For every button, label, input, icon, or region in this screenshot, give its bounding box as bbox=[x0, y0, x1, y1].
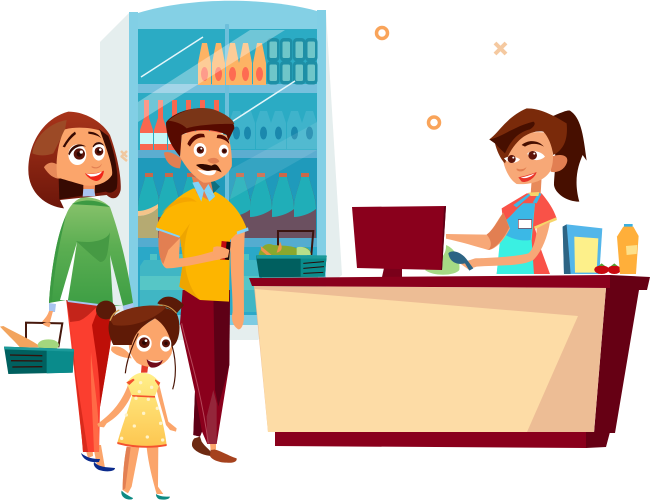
shelf bottles: orange bbox=[198, 43, 266, 85]
girl arms bbox=[97, 384, 177, 432]
shelf cans bbox=[267, 38, 318, 84]
girl bbox=[96, 297, 184, 500]
man bbox=[156, 108, 249, 463]
tomatoes bbox=[594, 263, 621, 274]
woman bbox=[28, 112, 134, 471]
cereal box bbox=[563, 224, 602, 274]
cashier shirt bbox=[497, 193, 557, 274]
man collar bbox=[192, 182, 215, 202]
shelf large bottles bbox=[140, 254, 318, 312]
girl head bbox=[96, 297, 184, 389]
decorative ring bbox=[376, 28, 388, 38]
till monitor bbox=[352, 206, 446, 277]
decorative ring bbox=[428, 117, 440, 128]
counter base side bbox=[586, 432, 610, 448]
decorative cross small bbox=[121, 151, 127, 161]
man trousers bbox=[180, 290, 230, 444]
woman legs and shoes bbox=[81, 440, 115, 471]
man shoes bbox=[192, 437, 237, 463]
counter front highlight bbox=[255, 289, 578, 432]
woman's basket bbox=[0, 322, 74, 374]
counter top bbox=[249, 275, 610, 288]
cashier bbox=[425, 108, 587, 275]
shelf jugs bbox=[229, 111, 317, 149]
girl dress bbox=[117, 373, 167, 448]
girl shoes bbox=[121, 491, 170, 500]
cashier name tag bbox=[518, 220, 532, 228]
cashier eyes and mouth bbox=[504, 141, 545, 182]
counter side bbox=[594, 275, 650, 433]
produce being scanned bbox=[425, 245, 460, 275]
counter base bbox=[275, 432, 586, 448]
man left arm and shirt bbox=[156, 188, 249, 329]
cashier face bbox=[502, 132, 553, 184]
girl legs bbox=[123, 447, 163, 494]
man head bbox=[164, 108, 234, 202]
juice bottle bbox=[617, 224, 639, 274]
cashier sleeve trim bbox=[534, 217, 557, 229]
cashier fringe shadow bbox=[489, 122, 535, 153]
counter front bbox=[254, 286, 606, 432]
fridge: drinks cabinet bbox=[100, 1, 342, 340]
glass reflections bbox=[138, 30, 317, 200]
counter basket bbox=[256, 231, 327, 277]
cashier apron bbox=[497, 192, 541, 274]
shelf bottles: red bbox=[140, 100, 223, 150]
woman head bbox=[28, 112, 121, 208]
woman cuffs and hand bbox=[42, 303, 134, 325]
checkout counter bbox=[249, 275, 650, 448]
cashier hair front bbox=[489, 108, 567, 163]
woman shirt hem bbox=[66, 298, 115, 308]
woman trousers bbox=[66, 298, 115, 452]
woman sweater bbox=[49, 197, 133, 306]
girl neck bbox=[141, 365, 148, 373]
shelf bottles: teal bbox=[138, 173, 316, 238]
cashier neck and ear bbox=[531, 155, 567, 194]
decorative cross bbox=[495, 43, 506, 54]
cashier arms bbox=[446, 213, 550, 271]
cashier hair back bbox=[547, 110, 587, 202]
